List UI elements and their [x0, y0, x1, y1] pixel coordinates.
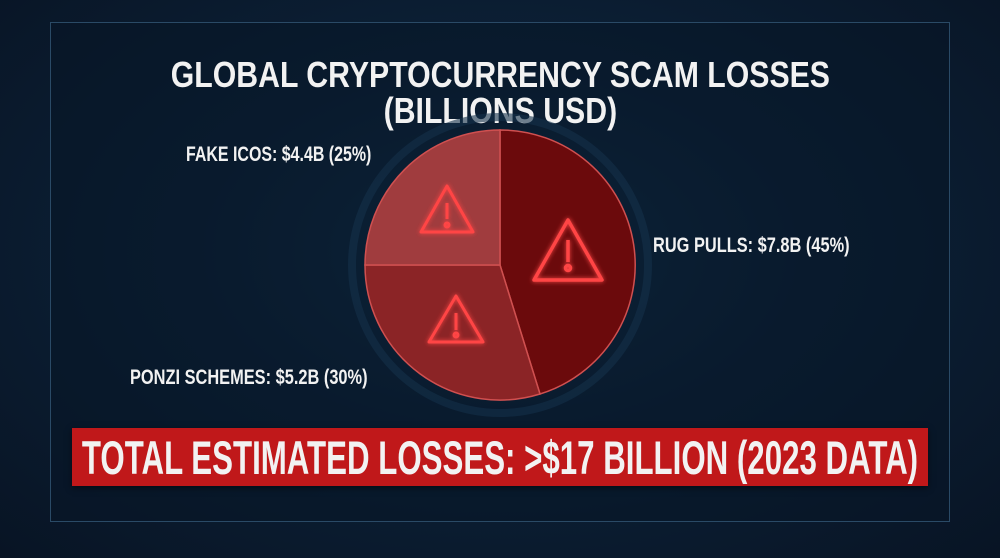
slice: rug pulls	[500, 130, 635, 394]
label: fake ICOs: FAKE ICOS: $4.4B (25%)	[186, 143, 371, 166]
slice: fake ICOs	[365, 130, 500, 265]
slice: ponzi	[365, 265, 540, 400]
title: (BILLIONS USD)	[383, 90, 617, 131]
title: GLOBAL CRYPTOCURRENCY SCAM LOSSES	[170, 54, 830, 95]
label: ponzi: PONZI SCHEMES: $5.2B (30%)	[130, 366, 368, 389]
icon: warning ponzi	[429, 296, 483, 342]
title	[170, 54, 830, 131]
icon: warning fake ICOs	[421, 186, 473, 232]
label: rug pulls: RUG PULLS: $7.8B (45%)	[653, 234, 850, 257]
icon: warning rug pulls	[534, 220, 602, 280]
banner: total losses: TOTAL ESTIMATED LOSSES: >$17 BILLION (2023 DATA)	[82, 431, 918, 484]
